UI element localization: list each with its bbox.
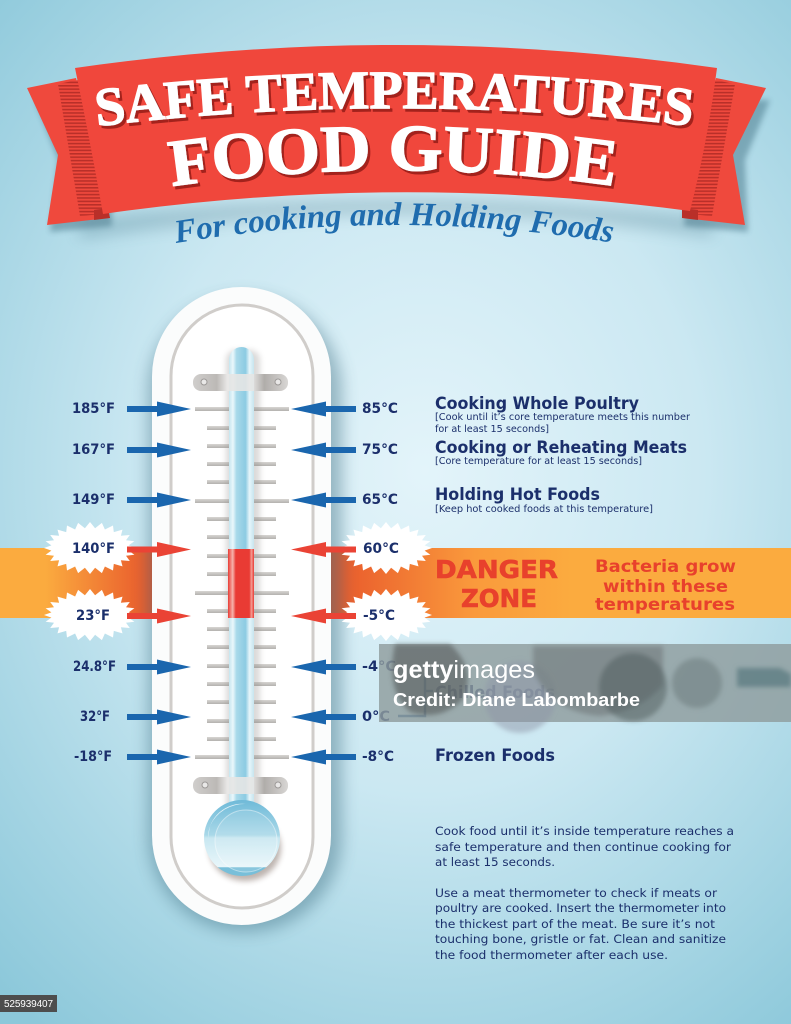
text: cooking or reheating meats <box>435 438 687 467</box>
danger zone heading <box>435 555 558 613</box>
text: instructions paragraph two: the food thermometer after each use. <box>435 948 668 962</box>
text: holding hot foods <box>435 485 653 515</box>
text: instructions paragraph one: Cook food until it’s inside temperature reaches a <box>435 824 734 838</box>
bulb <box>204 800 281 881</box>
text: instructions paragraph two: touching bone, gristle or fat. Clean and sanitize <box>435 932 726 946</box>
fahrenheit labels: 167°F <box>72 442 115 458</box>
ribbon fringe <box>58 80 735 220</box>
celsius labels: 85°C <box>362 401 398 417</box>
danger zone heading: DANGER <box>435 555 558 584</box>
text: frozen foods: Frozen Foods <box>435 746 555 765</box>
scale ticks <box>195 407 289 759</box>
subtitle: For cooking and Holding Foods <box>176 202 614 243</box>
lower clip <box>193 777 288 794</box>
celsius labels: 0°C <box>362 709 390 725</box>
danger zone description <box>595 557 736 615</box>
text: cooking or reheating meats: [Core temperature for at least 15 seconds] <box>435 456 642 467</box>
danger zone description: Bacteria grow <box>595 557 736 577</box>
text: holding hot foods: [Keep hot cooked foods at this temperature] <box>435 504 653 515</box>
glass tube <box>229 347 254 810</box>
fahrenheit labels <box>72 401 116 765</box>
celsius labels: -8°C <box>362 749 394 765</box>
red danger section of tube <box>228 549 254 618</box>
text: instructions paragraph two: the thickest part of the meat. Be sure it’s not <box>435 917 716 931</box>
celsius labels: 75°C <box>362 442 398 458</box>
fahrenheit labels: 185°F <box>72 401 115 417</box>
starburst callouts <box>44 522 432 641</box>
celsius labels <box>362 401 399 765</box>
left ribbon tail <box>27 78 108 225</box>
arrows: blue celsius side <box>291 402 356 764</box>
danger zone band <box>0 548 791 618</box>
text: instructions paragraph two: poultry are cooked. Insert the thermometer into <box>435 901 726 915</box>
text: cooking whole poultry: for at least 15 seconds] <box>435 424 549 435</box>
danger zone description: temperatures <box>595 595 735 615</box>
text: holding hot foods: Holding Hot Foods <box>435 485 600 504</box>
danger zone heading: ZONE <box>461 584 537 613</box>
title banner <box>27 45 771 242</box>
title line one: SAFE TEMPERATURES <box>96 72 694 129</box>
fahrenheit labels: 23°F <box>76 608 110 624</box>
text: cooking or reheating meats: Cooking or Reheating Meats <box>435 438 687 457</box>
fahrenheit labels: 149°F <box>72 492 115 508</box>
celsius labels: -4°C <box>362 659 396 675</box>
celsius labels: 65°C <box>362 492 398 508</box>
right ribbon tail <box>684 78 766 225</box>
fahrenheit labels: 24.8°F <box>73 659 116 675</box>
thermometer <box>148 287 342 932</box>
danger zone description: within these <box>603 577 728 597</box>
ribbon main band <box>75 45 717 214</box>
text: instructions paragraph two <box>435 886 726 962</box>
watermark panel: gettyimages <box>393 656 535 684</box>
image id tag: 525939407 <box>4 999 53 1010</box>
fahrenheit labels: 32°F <box>80 709 110 725</box>
text: instructions paragraph one: at least 15 seconds. <box>435 855 555 869</box>
fahrenheit labels: -18°F <box>74 749 112 765</box>
text: cooking whole poultry: Cooking Whole Poultry <box>435 394 639 413</box>
celsius labels: 60°C <box>363 541 399 557</box>
fahrenheit labels: 140°F <box>72 541 115 557</box>
celsius labels: -5°C <box>363 608 395 624</box>
title line two: FOOD GUIDE <box>166 126 617 190</box>
text: chilled foods: Chilled Foods <box>435 683 555 702</box>
text: cooking whole poultry: [Cook until it’s core temperature meets this number <box>435 412 690 423</box>
text: instructions paragraph one: safe temperature and then continue cooking for <box>435 840 731 854</box>
clip strap over tube lower <box>229 777 254 794</box>
upper clip <box>193 374 288 391</box>
arrows: blue fahrenheit side <box>127 402 191 764</box>
text: instructions paragraph two: Use a meat thermometer to check if meats or <box>435 886 717 900</box>
watermark panel <box>379 644 791 733</box>
watermark panel: Credit: Diane Labombarbe <box>393 690 640 710</box>
tube shadow <box>226 350 260 820</box>
text: cooking whole poultry <box>435 394 690 435</box>
clip strap over tube <box>229 374 254 391</box>
chilled foods bracket <box>398 673 433 716</box>
arrows: red danger limits <box>127 542 356 624</box>
image id tag <box>0 995 57 1012</box>
text: instructions paragraph one <box>435 824 734 869</box>
